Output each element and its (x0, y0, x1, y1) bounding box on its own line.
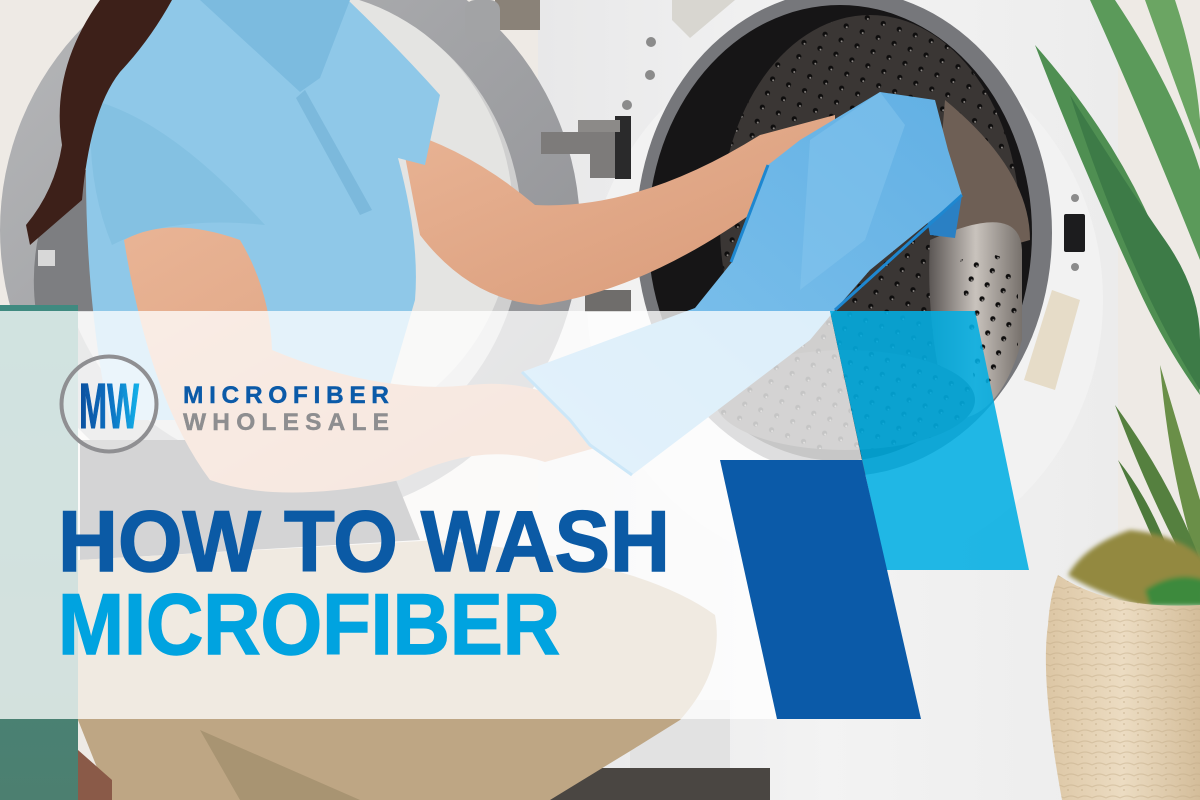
moss (1068, 530, 1200, 606)
dark blue parallelogram (720, 460, 921, 719)
waist dark clothing (80, 440, 420, 560)
title line 2: MICROFIBER (58, 577, 560, 673)
teal chair (0, 305, 78, 800)
sleeve (91, 100, 265, 245)
door hinge (541, 116, 631, 312)
polo shirt (86, 0, 440, 420)
shirt placket (296, 90, 372, 215)
trouser shade (200, 730, 360, 800)
logo (62, 356, 389, 452)
microfiber towel (522, 92, 962, 475)
title (58, 494, 670, 673)
near arm (124, 228, 595, 492)
cyan parallelogram (830, 311, 1029, 570)
title line 1: HOW TO WASH (58, 494, 670, 590)
washing machine body (538, 0, 1118, 800)
shirt collar (200, 0, 350, 92)
floor (550, 768, 770, 800)
logo ring (62, 356, 156, 452)
cream trousers (78, 540, 717, 800)
door gasket and drum (636, 0, 1052, 476)
plant leaves (1035, 0, 1200, 590)
foot (78, 750, 112, 800)
washer screws, latch and sticker (622, 0, 1085, 390)
logo wordmark bottom: WHOLESALE (183, 409, 389, 436)
far arm (400, 115, 835, 305)
logo wordmark top: MICROFIBER (183, 382, 389, 409)
translucent white band (0, 311, 862, 719)
woman (26, 0, 835, 800)
logo monogram: MW (79, 370, 139, 442)
open washer door (0, 0, 580, 520)
hair (26, 0, 172, 245)
plant pot (1046, 575, 1200, 800)
